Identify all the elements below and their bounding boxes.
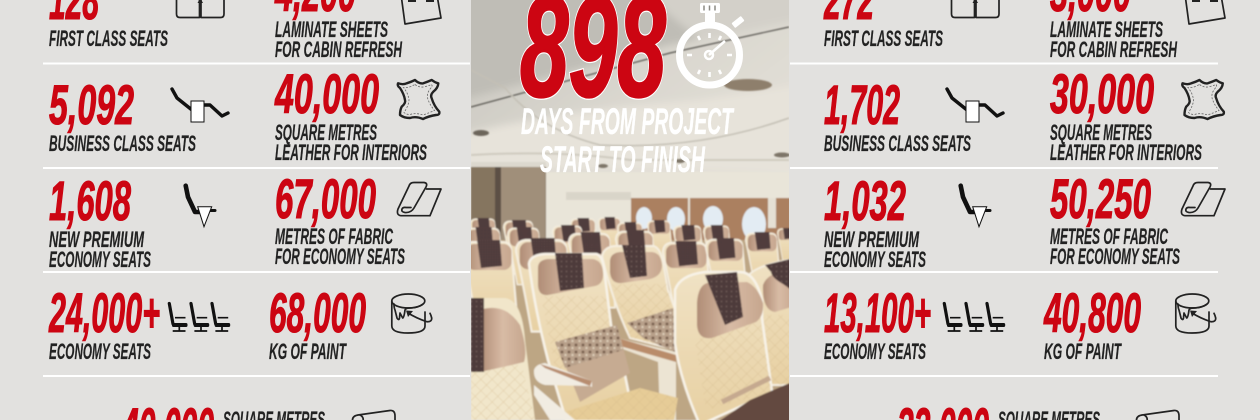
- stat: premium economy seats: ECONOMY SEATS: [824, 247, 926, 272]
- divider row 3: [43, 271, 470, 273]
- stat: fabric: 50,250: [1050, 167, 1151, 230]
- stat: fabric: FOR ECONOMY SEATS: [275, 244, 405, 269]
- stat: economy seats: [824, 281, 931, 364]
- foreground seat: [471, 298, 535, 420]
- caption: days from project start to finish: DAYS FROM PROJECT: [521, 101, 735, 142]
- icon: business seat: [172, 89, 228, 122]
- icon: economy seats: [169, 304, 230, 331]
- caption: days from project start to finish: [521, 101, 735, 180]
- stat: laminate sheets: [1050, 0, 1177, 62]
- bulkhead wall: [546, 172, 790, 242]
- stat: fabric: 67,000: [275, 167, 376, 230]
- stat: leather: [274, 62, 427, 165]
- ceiling: [471, 0, 789, 172]
- divider row 1: [790, 62, 1218, 64]
- stat: paint: KG OF PAINT: [1044, 339, 1122, 364]
- stat: leather: 40,000: [274, 62, 379, 125]
- cushion front: [565, 388, 678, 420]
- divider row 2: [43, 167, 470, 169]
- stat: leather: 30,000: [1050, 62, 1154, 125]
- stat: leather: SQUARE METRES: [275, 120, 377, 145]
- icon: leather hide: [1182, 80, 1224, 119]
- stat: premium economy seats: [824, 169, 926, 272]
- stat: fabric: [275, 167, 405, 269]
- stat: business class seats: BUSINESS CLASS SEATS: [49, 131, 196, 156]
- icon: vinyl roll: [352, 410, 395, 420]
- icon: stopwatch: [680, 3, 745, 85]
- seat C: [675, 272, 772, 420]
- icon: paint tin: [1176, 294, 1216, 333]
- stat: fabric: [1050, 167, 1180, 269]
- stat: economy seats: 24,000+: [48, 281, 160, 344]
- stat: premium economy seats: [49, 169, 151, 272]
- stat: economy seats: ECONOMY SEATS: [49, 339, 151, 364]
- stat: premium economy seats: NEW PREMIUM: [824, 227, 920, 252]
- seat B: [602, 246, 676, 350]
- stat: laminate sheets: LAMINATE SHEETS: [1050, 17, 1163, 42]
- stat: premium economy seats: NEW PREMIUM: [49, 227, 145, 252]
- armrest front: [534, 363, 592, 387]
- armrest middle: [618, 338, 676, 420]
- icon: laminate sheet: [1186, 0, 1225, 24]
- big number: 898 days: [520, 0, 666, 127]
- divider row 3: [790, 271, 1218, 273]
- stat: business class seats: BUSINESS CLASS SEATS: [824, 131, 971, 156]
- stat: first class seats: FIRST CLASS SEATS: [49, 26, 168, 51]
- icon: first class seat: [952, 0, 999, 18]
- stat: first class seats: [823, 0, 943, 51]
- stat: economy seats: [48, 281, 160, 364]
- icon: premium economy seat: [186, 186, 215, 227]
- stat: leather: [1050, 62, 1202, 165]
- stat: premium economy seats: ECONOMY SEATS: [49, 247, 151, 272]
- stat: paint: 40,800: [1043, 281, 1141, 344]
- stat: business class seats: 1,702: [824, 73, 900, 136]
- stat: first class seats: FIRST CLASS SEATS: [824, 26, 943, 51]
- icon: economy seats: [944, 304, 1005, 331]
- stat: laminate sheets: [274, 0, 402, 62]
- divider row 1: [43, 62, 470, 64]
- stat: laminate sheets: FOR CABIN REFRESH: [275, 37, 402, 62]
- pillow back: [627, 308, 675, 352]
- seat A: [529, 254, 634, 420]
- stat: premium economy seats: 1,608: [49, 169, 131, 232]
- stat: fabric: METRES OF FABRIC: [275, 224, 393, 249]
- panel: left statistics: [43, 0, 470, 420]
- stat: business class seats: 5,092: [49, 73, 134, 136]
- seat E right: [748, 258, 789, 388]
- stat: premium economy seats: 1,032: [824, 169, 906, 232]
- distant seat rows: [471, 217, 497, 228]
- divider row 4: [43, 375, 470, 377]
- stat: first class seats: [49, 0, 168, 51]
- panel: right statistics: [790, 0, 1225, 420]
- divider row 4: [790, 375, 1218, 377]
- stat: leather: SQUARE METRES: [1050, 120, 1152, 145]
- stat: paint: [269, 281, 366, 364]
- icon: laminate sheet: [402, 0, 441, 24]
- icon: business seat: [947, 89, 1003, 122]
- stat: economy seats: 13,100+: [824, 281, 931, 344]
- stat: leather: LEATHER FOR INTERIORS: [275, 140, 427, 165]
- icon: first class seat: [176, 0, 224, 18]
- wood window panels: [630, 197, 789, 241]
- pillow front: [566, 340, 630, 402]
- curtains: [544, 166, 547, 238]
- icon: vinyl roll: [1136, 410, 1179, 420]
- stat: paint: [1043, 281, 1141, 364]
- stat: economy seats: ECONOMY SEATS: [824, 339, 926, 364]
- stat: paint: 68,000: [269, 281, 366, 344]
- icon: fabric roll: [1181, 182, 1225, 216]
- stat: paint: KG OF PAINT: [269, 339, 347, 364]
- icon: fabric roll: [397, 182, 441, 216]
- panel: central cabin photo: [461, 0, 801, 420]
- icon: premium economy seat: [961, 186, 990, 227]
- icon: leather hide: [398, 80, 439, 119]
- caption: days from project start to finish: START TO FINISH: [540, 139, 706, 180]
- icon: paint tin: [392, 294, 432, 333]
- divider row 2: [790, 167, 1218, 169]
- stat: laminate sheets: LAMINATE SHEETS: [275, 17, 388, 42]
